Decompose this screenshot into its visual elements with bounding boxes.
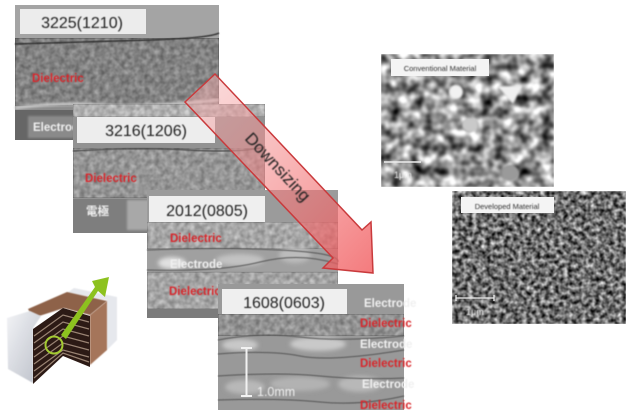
panel: 3216 (1206) micrograph [73, 104, 265, 233]
labels: electrode and dielectric stack [360, 298, 416, 412]
image label: Developed Material [461, 197, 554, 213]
label: Dielectric top: Dielectric [170, 233, 222, 245]
scale bar 1.0mm [241, 348, 295, 399]
label: Electrode: Electrode [170, 259, 222, 271]
label: Electrode: Electrode [33, 122, 85, 134]
back end cap [67, 288, 117, 350]
panel: 3225 (1210) micrograph [15, 5, 219, 140]
arrow label: Downsizing: Downsizing [241, 129, 314, 205]
scale bar: 1μm: 1μm [394, 170, 412, 180]
green circle highlight [46, 336, 62, 354]
scale bar: 1μm [384, 162, 421, 180]
image label: Developed Material: Developed Material [475, 202, 540, 211]
panel: 1608 (0603) micrograph [218, 284, 416, 412]
labels: electrode and dielectric stack: Electrode [360, 339, 412, 351]
scale bar 1.0mm: 1.0mm [257, 385, 295, 399]
brown right face [90, 301, 107, 365]
label: Dielectric: Dielectric [85, 173, 137, 185]
labels: electrode and dielectric stack: Electrode [362, 379, 414, 391]
size label: 1608(0603) [222, 289, 347, 314]
panel: conventional material micrograph [381, 54, 554, 187]
green arrow [61, 277, 109, 339]
size label: 2012(0805) [149, 196, 265, 222]
panel: 2012 (0805) micrograph [147, 190, 338, 318]
label: Dielectric: Dielectric [32, 73, 84, 85]
brown top face [28, 292, 107, 318]
size label: 3225(1210): 3225(1210) [41, 15, 123, 32]
size label: 2012(0805): 2012(0805) [166, 203, 248, 220]
scale bar: 1μm: 1μm [466, 307, 484, 317]
labels: electrode and dielectric stack: Dielectric [360, 400, 412, 412]
label: Dielectric bottom: Dielectric [169, 286, 221, 298]
labels: electrode and dielectric stack: Electrode [364, 298, 416, 310]
arrow: Downsizing [185, 74, 373, 273]
labels: electrode and dielectric stack: Dielectric [360, 358, 412, 370]
image label: Conventional Material [391, 59, 489, 76]
image label: Conventional Material: Conventional Material [404, 64, 477, 73]
dark cut faces with internal electrode layers [33, 308, 90, 384]
size label: 3216(1206) [77, 117, 215, 143]
label: electrode (Japanese): 電極 [86, 204, 109, 218]
panel: developed material micrograph [452, 191, 626, 324]
size label: 1608(0603): 1608(0603) [243, 295, 325, 312]
front end cap [7, 311, 41, 383]
scale bar: 1μm [456, 295, 494, 317]
labels: electrode and dielectric stack: Dielectric [360, 318, 412, 330]
size label: 3216(1206): 3216(1206) [105, 123, 187, 140]
icon: multilayer ceramic capacitor cutaway [7, 277, 117, 384]
size label: 3225(1210) [20, 9, 146, 34]
